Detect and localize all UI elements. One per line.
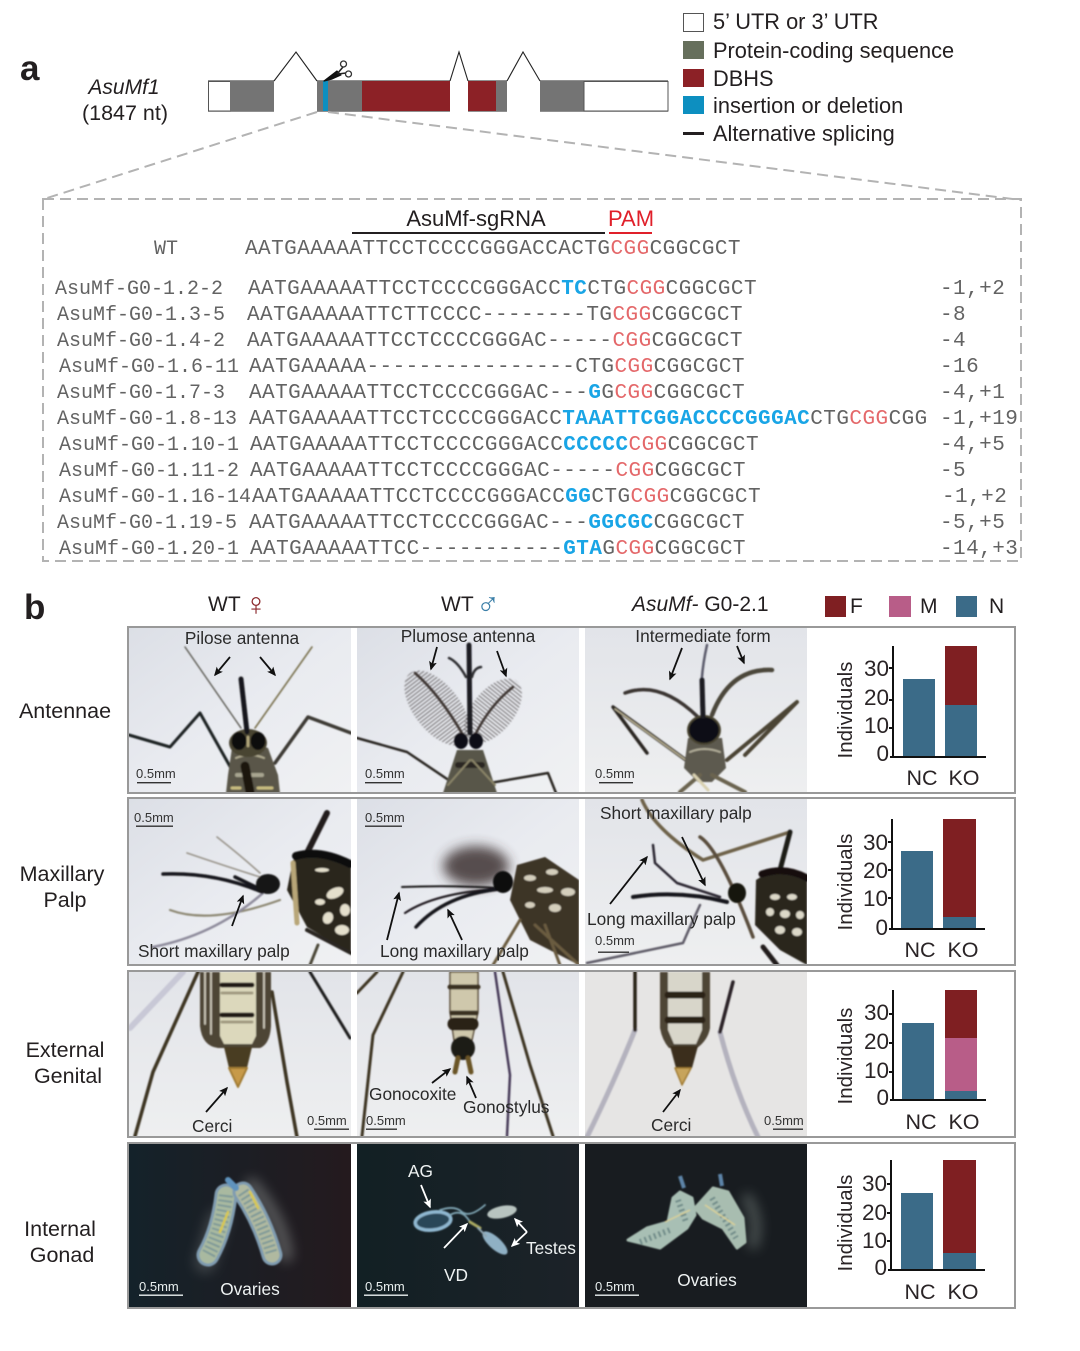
sequence alignment rows: AsuMf-G0-1.8-13 [57,408,237,431]
panel frame [128,971,1015,1137]
row label: External Genital [26,1038,104,1088]
label: short maxillary palp: Short maxillary palp [600,803,752,823]
sequence alignment rows: AsuMf-G0-1.7-3 [57,382,225,405]
label: ovaries: Ovaries [220,1279,280,1299]
sequence alignment rows: AsuMf-G0-1.16-14 [59,486,251,509]
scale bar: 0.5mm [365,1279,405,1294]
bar chart: antennae: 20 [864,685,889,710]
sequence alignment rows: AATGAAAAATTCCTCCCCGGGACCCCCCCCGGCGGCGCT [250,434,759,457]
bar chart: maxillary palp: 10 [863,886,888,911]
bar chart: maxillary palp: 20 [863,858,888,883]
sequence alignment rows: AsuMf-G0-1.4-2 [57,330,225,353]
photo: WT female genital [129,972,351,1137]
row label: Internal Gonad: Internal [24,1217,96,1241]
sequence alignment rows: -5 [940,460,966,483]
sequence alignment rows: -1,+2 [940,278,1005,301]
bar chart: antennae: NC [906,766,938,790]
label: long maxillary palp: Long maxillary palp [380,941,529,961]
sequence alignment rows: AATGAAAAA----------------CTGCGGCGGCGCT [249,356,745,379]
panel letter b: b [24,588,45,627]
gene name label [82,76,168,125]
sequence alignment rows: -4 [940,330,966,353]
sequence alignment rows: AsuMf-G0-1.11-2 [59,460,239,483]
column heading: WT female: ♀ [244,586,268,622]
arrows: reproductive organs [421,1185,527,1248]
bar chart: internal gonad: 20 [862,1200,887,1225]
label: AG: AG [408,1161,433,1181]
row label: Antennae: Antennae [19,699,111,723]
sequence alignment rows: AATGAAAAATTCCTCCCCGGGAC---GGCGGCGGCGCT [249,382,745,405]
panel: antennae row [128,626,1015,793]
bar chart: internal gonad: 10 [862,1228,887,1253]
sequence alignment rows [55,278,1018,561]
legend: gene features: DBHS [713,66,774,91]
panel frame [128,798,1015,965]
row label: Internal Gonad [24,1217,96,1267]
photo: mutant palp [585,799,807,965]
photo: WT female antennae [129,628,351,793]
photo: WT male palp [357,799,579,965]
bar chart: external genital: 10 [864,1058,889,1083]
column heading: WT male: WT [441,593,474,616]
scale bar: 0.5mm [139,1279,179,1294]
column heading: WT male: ♂ [476,586,500,622]
sequence alignment rows: AsuMf-G0-1.20-1 [59,538,239,561]
sequence alignment rows: AsuMf-G0-1.6-11 [59,356,239,379]
sequence alignment rows: -14,+3 [940,538,1018,561]
bar chart: antennae: 0 [876,741,889,766]
label: long maxillary palp: Long maxillary palp [587,909,736,929]
label: short maxillary palp: Short maxillary palp [138,941,290,961]
bar chart: maxillary palp [834,819,985,962]
photo: WT male antennae [357,626,579,793]
legend: gene features: insertion or deletion [713,93,903,118]
bar chart: antennae: 10 [864,713,889,738]
sgRNA label and bar: AsuMf-sgRNA [406,206,546,231]
sequence alignment rows: AsuMf-G0-1.2-2 [55,278,223,301]
scale bar: 0.5mm [595,766,635,781]
legend: gene features: 5’ UTR or 3’ UTR [713,9,879,34]
arrows: genital parts [432,1069,476,1098]
label: VD: VD [444,1265,468,1285]
bar chart: external genital: NC [905,1110,937,1134]
row label: External Genital: Genital [34,1064,102,1088]
photo: WT female palp [129,799,351,965]
bar chart: external genital: 0 [876,1085,889,1110]
scale bar: 0.5mm [136,766,176,781]
bar chart: internal gonad: 30 [862,1171,887,1196]
scale bar: 0.5mm [595,1279,635,1294]
gene name label: AsuMf1 [86,76,160,99]
row label: External Genital: External [26,1038,104,1062]
sequence alignment rows: AATGAAAAATTCCTCCCCGGGAC---GGCGCCGGCGCT [249,512,745,535]
label: plumose antenna: Plumose antenna [401,626,536,646]
row label: Maxillary Palp [20,862,105,912]
bar chart: antennae [834,646,986,790]
scale bar: 0.5mm [365,766,405,781]
arrow: short maxillary palp [232,896,243,926]
panel: external genital row [128,971,1015,1137]
wild type sequence: AATGAAAAATTCCTCCCCGGGACCACTGCGGCGGCGCT [245,238,741,261]
arrows: pilose antenna [215,657,275,675]
label: pilose antenna: Pilose antenna [185,628,300,648]
column heading: WT male [441,586,500,622]
arrow: cerci [663,1090,680,1112]
legend: F M N [825,595,1004,618]
gene structure diagram [208,52,668,111]
label: ovaries: Ovaries [677,1270,737,1290]
bar chart: antennae: 30 [864,656,889,681]
sequence alignment rows: AATGAAAAATTCCTCCCCGGGACCGGCTGCGGCGGCGCT [252,486,761,509]
panel: maxillary palp row [128,798,1015,965]
bar chart: internal gonad: KO [947,1280,979,1304]
bar chart: internal gonad: 0 [874,1255,887,1280]
label: intermediate form: Intermediate form [635,626,771,646]
scale bar: 0.5mm [134,810,174,825]
bar chart: internal gonad: Individuals [834,1175,857,1271]
photo: mutant genital [585,972,807,1137]
sequence alignment rows: -5,+5 [940,512,1005,535]
sequence alignment rows: -1,+19 [940,408,1018,431]
sequence alignment rows: -8 [940,304,966,327]
bar chart: internal gonad [834,1160,985,1304]
label: gonocoxite: Gonocoxite [369,1084,456,1104]
scale bar: 0.5mm [764,1113,804,1128]
label: testes: Testes [526,1238,576,1258]
legend: F M N: F [850,595,863,618]
zoom callout dashed box [43,112,1021,561]
panel frame [128,627,1015,793]
scale bar: 0.5mm [307,1113,347,1128]
arrows: long maxillary palp [387,893,462,940]
photo: mutant ovaries [585,1144,807,1308]
bar chart: external genital: 30 [864,1000,889,1025]
row label: Maxillary Palp: Maxillary [20,862,105,886]
photo: mutant antennae [585,626,807,793]
bar chart: antennae: Individuals [834,662,857,758]
sequence alignment rows: AsuMf-G0-1.10-1 [59,434,239,457]
bar chart: maxillary palp: 30 [863,830,888,855]
bar chart: antennae: KO [948,766,980,790]
bar chart: external genital: Individuals [834,1008,857,1104]
sequence alignment rows: AsuMf-G0-1.19-5 [57,512,237,535]
bar chart: maxillary palp: KO [947,938,979,962]
bar chart: internal gonad: NC [904,1280,936,1304]
bar chart: external genital [834,990,986,1134]
label: gonostylus: Gonostylus [463,1097,550,1117]
panel: internal gonad row [128,1143,1015,1308]
row label: Maxillary Palp: Palp [43,888,87,912]
sequence alignment rows: AATGAAAAATTCTTCCCC--------TGCGGCGGCGCT [247,304,743,327]
row label: Internal Gonad: Gonad [30,1243,94,1267]
photo: WT male genital [357,972,579,1137]
legend: gene features [683,9,954,146]
sequence alignment rows: -4,+5 [940,434,1005,457]
sequence alignment rows: AATGAAAAATTCCTCCCCGGGACCTAAATTCGGACCCCGGGACCTGCGGCGG [249,408,928,431]
legend: F M N: N [989,595,1004,618]
sequence alignment rows: -1,+2 [942,486,1007,509]
bar chart: maxillary palp: Individuals [834,834,857,930]
scale bar: 0.5mm [366,1113,406,1128]
legend: gene features: Alternative splicing [713,121,895,146]
bar chart: external genital: 20 [864,1029,889,1054]
bar chart: maxillary palp: 0 [875,915,888,940]
scale bar: 0.5mm [365,810,405,825]
column heading: AsuMf G0-2.1: AsuMf- G0-2.1 [630,593,769,616]
panel frame [128,1143,1015,1308]
icon: scissors [324,61,352,81]
arrow: cerci [206,1088,227,1112]
sequence alignment rows: AATGAAAAATTCC-----------GTAGCGGCGGCGCT [250,538,746,561]
scale bar: 0.5mm [595,933,635,948]
sequence alignment rows: AsuMf-G0-1.3-5 [57,304,225,327]
sequence alignment rows: -16 [940,356,979,379]
label: cerci: Cerci [651,1115,691,1135]
sequence alignment rows: -4,+1 [940,382,1005,405]
column heading: WT female [208,586,268,622]
photo: WT female ovaries [129,1144,351,1308]
PAM label and bar: PAM [608,206,654,231]
label: cerci: Cerci [192,1116,232,1136]
legend: gene features: Protein-coding sequence [713,38,954,63]
gene name label: (1847 nt) [82,101,168,125]
panel letter a: a [20,49,40,88]
arrows: intermediate form [670,646,744,679]
bar chart: maxillary palp: NC [904,938,936,962]
sequence alignment rows: AATGAAAAATTCCTCCCCGGGAC-----CGGCGGCGCT [247,330,743,353]
legend: F M N: M [920,595,938,618]
photo: WT male gonads [357,1144,579,1308]
column heading: WT female: WT [208,593,241,616]
bar chart: external genital: KO [948,1110,980,1134]
sequence alignment rows: AATGAAAAATTCCTCCCCGGGAC-----CGGCGGCGCT [250,460,746,483]
sequence alignment rows: AATGAAAAATTCCTCCCCGGGACCTCCTGCGGCGGCGCT [248,278,757,301]
wild type sequence: WT [154,238,178,261]
arrows: maxillary palps [610,837,705,904]
arrows: plumose antenna [431,647,506,676]
